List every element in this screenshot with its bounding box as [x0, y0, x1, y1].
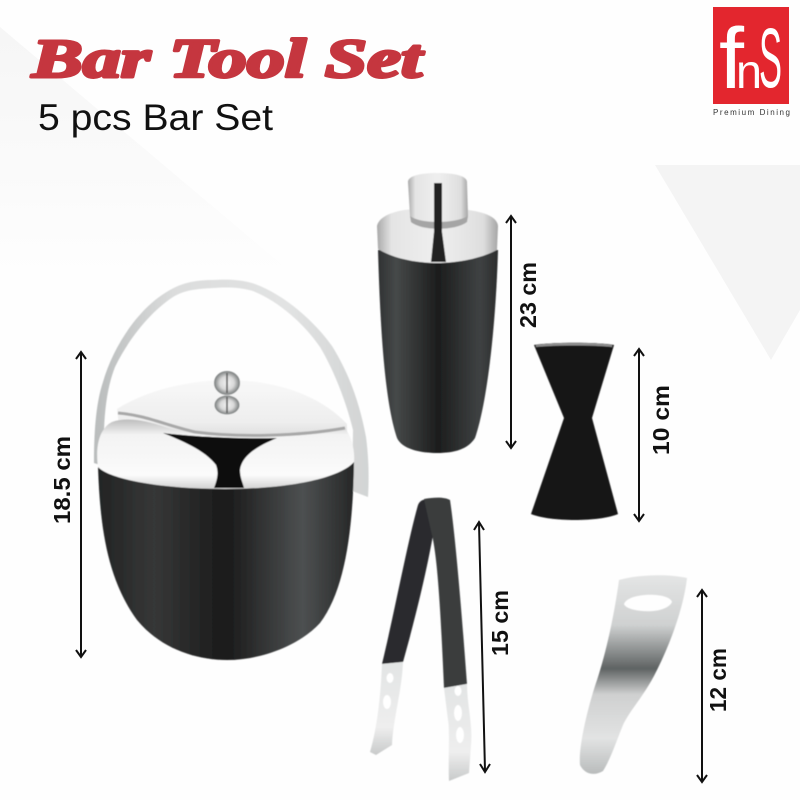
logo — [713, 7, 790, 117]
left tong arm — [382, 499, 433, 664]
logo letters — [719, 11, 782, 107]
dimension: bucket height: 18.5 cm — [49, 436, 75, 524]
jigger — [531, 343, 618, 520]
shaker reflection strip — [431, 183, 446, 262]
right tong tip — [444, 684, 471, 781]
dimension: shaker height — [506, 216, 541, 448]
bucket body — [98, 462, 354, 660]
ice bucket — [94, 280, 369, 660]
logo tagline: Premium Dining — [713, 108, 790, 117]
title: Bar Tool Set — [31, 28, 424, 89]
logo letters: f — [719, 11, 745, 107]
shaker body — [378, 250, 498, 453]
bucket handle — [94, 280, 369, 497]
subtitle: 5 pcs Bar Set — [38, 97, 274, 138]
dome reflection — [163, 433, 277, 488]
dimension: jigger height: 10 cm — [648, 385, 674, 455]
dimension: jigger height — [634, 349, 674, 521]
shaker cap — [408, 173, 468, 230]
bucket lid — [117, 380, 347, 440]
logo letters: n — [736, 46, 762, 99]
bottle opener — [580, 575, 687, 774]
dimension: tongs length: 15 cm — [487, 590, 513, 656]
left tong tip — [370, 662, 403, 755]
dimension: tongs length — [474, 522, 513, 772]
lid knob — [214, 371, 240, 414]
shaker shoulder — [377, 209, 498, 263]
right tong arm — [424, 498, 467, 688]
lid crease — [118, 413, 345, 435]
dimension: opener length: 12 cm — [705, 648, 731, 712]
dimension: bucket height — [49, 352, 86, 657]
cocktail shaker — [377, 173, 498, 453]
dimension: opener length — [697, 590, 731, 782]
ice tongs — [370, 498, 471, 781]
dimension: shaker height: 23 cm — [515, 262, 541, 328]
bucket front dome — [97, 420, 354, 489]
